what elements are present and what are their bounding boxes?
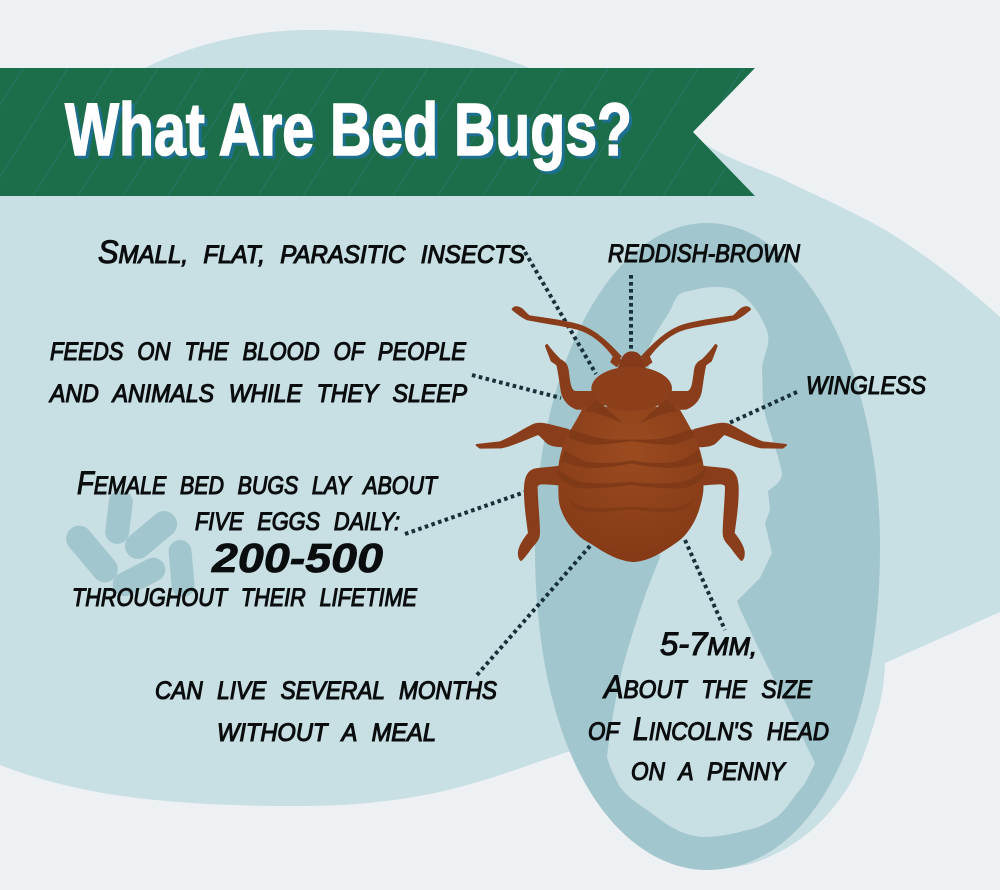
icon: eggs <box>61 489 195 600</box>
left limbs <box>477 307 621 560</box>
text: feeds on blood: FEEDS ON THE BLOOD OF PEOPLE <box>50 338 466 366</box>
title: What Are Bed Bugs? <box>65 88 632 171</box>
text: size: ABOUT THE SIZE <box>602 669 812 705</box>
pronotum <box>591 367 672 411</box>
text: eggs: FEMALE BED BUGS LAY ABOUT <box>77 465 438 501</box>
text: eggs <box>72 465 438 612</box>
text: months without meal: CAN LIVE SEVERAL MONTHS <box>155 677 497 705</box>
penny <box>535 223 880 870</box>
text: wingless: WINGLESS <box>806 372 926 400</box>
text: eggs: 200-500 <box>211 535 383 581</box>
text: eggs: THROUGHOUT THEIR LIFETIME <box>72 584 417 612</box>
text: months without meal <box>155 677 497 747</box>
text: size: OF LINCOLN'S HEAD <box>588 711 829 747</box>
right limbs <box>642 307 786 560</box>
text: feeds on blood <box>48 338 467 408</box>
text: months without meal: WITHOUT A MEAL <box>217 719 436 747</box>
text: size: ON A PENNY <box>631 758 787 786</box>
text: reddish-brown: REDDISH-BROWN <box>608 240 801 268</box>
text: feeds on blood: AND ANIMALS WHILE THEY SLEEP <box>48 380 467 408</box>
banner <box>0 68 755 196</box>
text: size: 5-7MM, <box>660 626 757 662</box>
text: small flat parasitic insects: SMALL, FLAT, PARASITIC INSECTS <box>98 234 525 270</box>
Lincoln head silhouette <box>607 287 815 837</box>
text: size <box>588 626 829 786</box>
text: eggs: FIVE EGGS DAILY: <box>195 508 400 536</box>
abdomen bands <box>557 400 705 512</box>
callout lines <box>405 252 797 675</box>
abdomen <box>558 407 704 562</box>
head <box>617 351 647 370</box>
icon: bed bug <box>477 307 786 562</box>
title: What Are Bed Bugs? <box>68 91 635 174</box>
